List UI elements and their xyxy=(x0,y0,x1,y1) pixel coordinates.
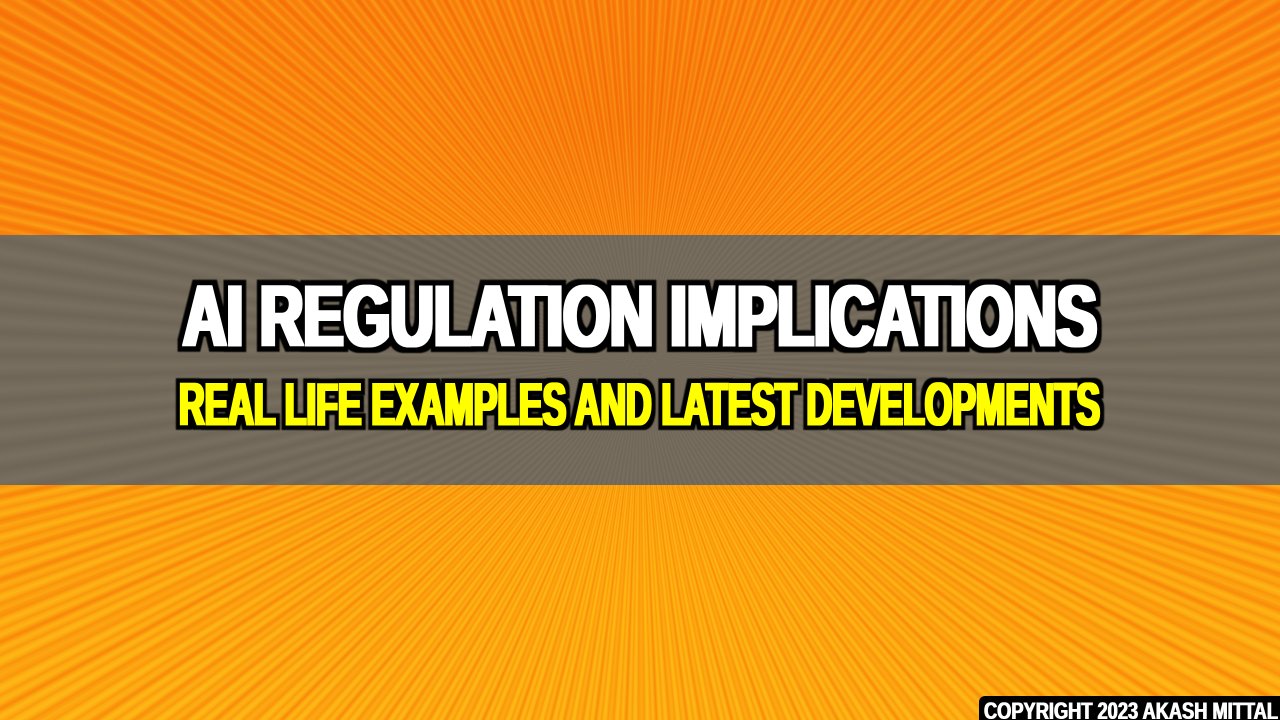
band radial texture xyxy=(0,235,1280,485)
panel: translucent grey title band xyxy=(0,235,1280,485)
